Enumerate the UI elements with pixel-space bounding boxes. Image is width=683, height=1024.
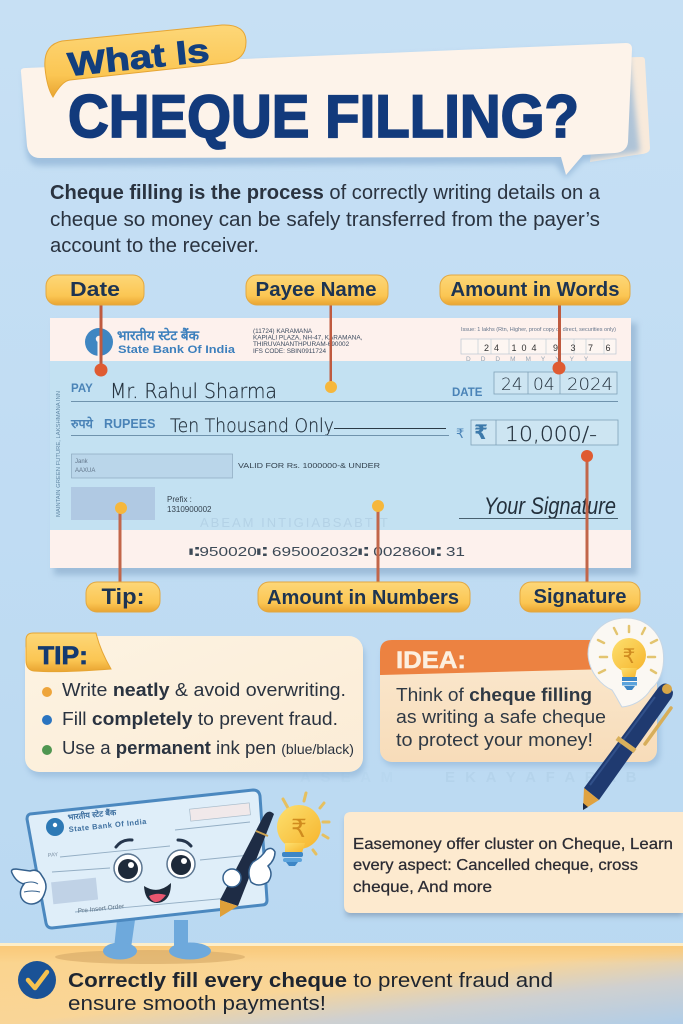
date boxes top: 24 104 <box>484 343 542 353</box>
icon: rupee bulb bubble: ₹ <box>623 646 635 668</box>
tip items <box>42 679 354 758</box>
icon: rupee bulb bubble <box>588 618 664 707</box>
connector: amount in words <box>552 304 566 374</box>
date boxes top: 9 3 7 6 <box>553 343 616 353</box>
label: signature: Signature <box>534 586 626 608</box>
tip items: Use a permanent ink pen (blue/black) <box>62 737 354 758</box>
pay line: PAY <box>71 383 93 395</box>
footer message <box>68 970 553 1015</box>
label: date: Date <box>70 279 120 301</box>
label: amount in words: Amount in Words <box>450 279 620 301</box>
cheque blue field <box>50 361 631 530</box>
panel: idea <box>380 640 660 766</box>
date field: 04 <box>533 375 555 395</box>
intro paragraph: cheque so money can be safely transferred from the payer’s <box>50 208 600 231</box>
mascot: cheque character: PAY <box>48 852 59 859</box>
mascot logo <box>46 818 64 836</box>
idea text <box>396 684 606 750</box>
label: payee name <box>246 275 388 305</box>
note text: every aspect: Cancelled cheque, cross <box>353 857 638 874</box>
mascot: cheque character: भारतीय स्टेट बैंक <box>67 807 117 822</box>
icon: rupee bulb: ₹ <box>291 815 307 843</box>
rupees line <box>70 416 449 437</box>
amount field: ₹ <box>474 422 488 444</box>
rupees line: रुपये <box>70 416 94 431</box>
date boxes top: Issue: 1 lakhs (Rtn, Higher, proof copy or direct, securities only) <box>461 327 616 333</box>
branch address <box>253 328 363 355</box>
panel: easemoney note <box>344 812 683 916</box>
footer message: ensure smooth payments! <box>68 993 326 1015</box>
icon: check badge <box>18 961 56 999</box>
panel: tip <box>25 633 365 777</box>
connector: signature <box>581 450 593 584</box>
tip badge: TIP: <box>38 642 88 670</box>
valid-for row <box>72 454 380 478</box>
label: signature <box>520 582 640 612</box>
pay line: Mr. Rahul Sharma <box>110 379 277 403</box>
footer band <box>0 943 683 1024</box>
icon: fountain pen <box>583 684 673 810</box>
tip items: Fill completely to prevent fraud. <box>62 708 338 729</box>
prefix box <box>71 487 212 520</box>
connector: tip <box>115 502 127 584</box>
rupees line: RUPEES <box>104 417 155 431</box>
intro paragraph <box>50 181 601 257</box>
label: date <box>46 275 144 305</box>
cheque <box>50 318 637 575</box>
connector: date <box>94 304 108 376</box>
bank logo: भारतीय स्टेट बैंक <box>117 327 200 343</box>
mascot: cheque character <box>12 790 275 964</box>
date boxes top <box>461 327 616 363</box>
title banner <box>21 25 650 178</box>
footer message: Correctly fill every cheque to prevent fraud and <box>68 970 553 992</box>
pay line <box>71 379 618 403</box>
mascot: cheque character: State Bank Of India <box>68 817 148 834</box>
rupees line: Ten Thousand Only <box>170 416 334 437</box>
intro paragraph: account to the receiver. <box>50 234 259 257</box>
branch address: IFS CODE: SBIN0911724 <box>253 348 326 355</box>
label: amount in numbers: Amount in Numbers <box>267 587 459 609</box>
idea text: to protect your money! <box>396 729 593 750</box>
tip badge <box>26 633 111 672</box>
date field: 24 <box>501 375 523 395</box>
side micro text: MAINTAIN GREEN FUTURE, LAKSHMANA INN <box>56 391 62 517</box>
label: tip <box>86 582 160 612</box>
faint watermark text: A S E A M <box>300 769 396 786</box>
prefix box: Prefix : <box>167 495 192 504</box>
mascot: cheque character: Pre Insert Order <box>77 903 125 915</box>
note text: cheque, And more <box>353 879 492 896</box>
branch address: KAPIALI PLAZA, NH-47, KARAMANA, <box>253 334 363 342</box>
amount field: 10,000/- <box>505 422 597 446</box>
branch address: (11724) KARAMANA <box>253 328 313 335</box>
signature: Your Signature <box>484 493 616 520</box>
faint watermark text <box>300 769 640 786</box>
valid-for row: VALID FOR Rs. 1000000-& UNDER <box>238 461 380 470</box>
label: payee name: Payee Name <box>256 279 376 301</box>
intro paragraph: Cheque filling is the process of correctly writing details on a <box>50 181 601 204</box>
idea heading: IDEA: <box>396 647 466 674</box>
micr line: ⑆950020⑆ 695002032⑆ 002860⑆ 31 <box>189 544 465 559</box>
mascot body <box>27 790 267 928</box>
title badge: what is: What Is <box>66 31 211 83</box>
note text <box>353 836 673 896</box>
valid-for row: AAXUA <box>75 468 95 474</box>
label: tip: Tip: <box>102 584 144 609</box>
amount field: ₹ <box>456 426 464 441</box>
prefix box: 1310900002 <box>167 505 212 514</box>
bank logo <box>85 327 236 356</box>
date field <box>452 372 617 399</box>
mascot legs <box>103 920 211 960</box>
mascot face <box>114 840 195 903</box>
label: amount in numbers <box>258 582 470 612</box>
bank logo: State Bank Of India <box>118 344 236 356</box>
label: amount in words <box>440 275 630 305</box>
mascot right hand <box>223 848 275 887</box>
title: cheque filling: CHEQUE FILLING? <box>68 83 579 150</box>
icon: rupee bulb <box>277 793 329 866</box>
connector: amount in numbers <box>372 500 384 584</box>
watermark: ABEAM INTIGIABSABT T <box>200 515 390 530</box>
amount field <box>456 420 618 446</box>
faint watermark text: E K A Y A F A R A B <box>445 769 640 786</box>
idea text: Think of cheque filling <box>396 684 592 705</box>
title badge: what is <box>45 25 246 97</box>
tip items: Write neatly & avoid overwriting. <box>62 679 346 700</box>
valid-for row: Jank <box>75 459 89 465</box>
date boxes top: DDDMMYYYY <box>466 356 598 363</box>
note text: Easemoney offer cluster on Cheque, Learn <box>353 836 673 853</box>
connector: payee name <box>325 304 337 393</box>
branch address: THIRUVANANTHPURAM-690002 <box>253 341 350 348</box>
mascot left hand <box>12 869 46 904</box>
date field: 2024 <box>567 375 613 395</box>
mascot pen <box>220 812 274 917</box>
idea text: as writing a safe cheque <box>396 706 606 727</box>
date field: DATE <box>452 387 483 399</box>
